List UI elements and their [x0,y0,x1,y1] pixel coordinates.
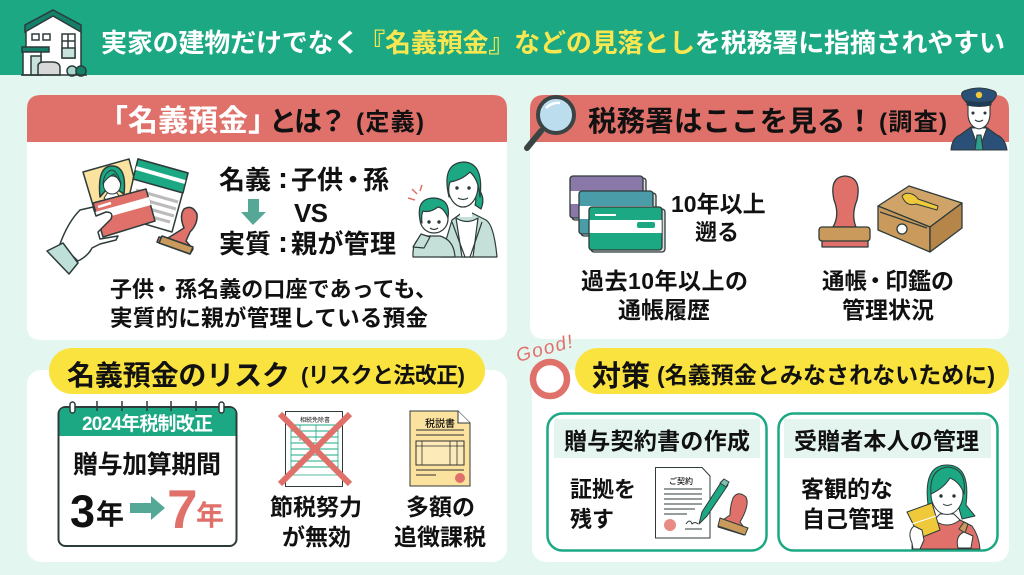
card: self management: 受贈者本人の管理 [794,428,979,454]
calendar: tax reform [58,401,236,546]
callout: over 10 years [671,191,766,245]
card: self management: 自己管理 [802,506,894,532]
label: tax savings void [270,494,362,550]
calendar: tax reform: 3 [70,486,95,537]
calendar: tax reform: 年 [96,499,124,530]
comparison text: nominee vs actual: 親が管理 [291,229,396,259]
icon: stamp [819,176,870,247]
calendar: tax reform: 年 [196,500,224,531]
label: passbook and seal: ・ [864,269,887,294]
definition text: 子供 [110,277,154,302]
label: heavy additional tax: 多額の [406,494,475,520]
card: gift contract: 残す [570,507,614,532]
heading: what is nominee deposit [98,105,424,138]
calendar: tax reform: 7 [167,478,198,540]
header band [0,0,1024,76]
icon: girl with passbook [907,465,980,549]
icon: crossed out document: 相続免除書 [300,416,330,424]
heading pill: countermeasures [575,348,1009,394]
definition text: 孫名義の口座であっても、 [175,277,437,302]
comparison text: nominee vs actual: : [278,226,288,259]
label: heavy additional tax [394,494,486,550]
label: passbook history: 過去10年以上の [581,268,748,294]
heading pill: risks: 名義預金のリスク [67,360,290,391]
label: passbook history: 通帳履歴 [618,297,710,323]
label: passbook history [581,268,748,323]
icon: good circle [514,331,577,396]
label: passbook and seal: 管理状況 [842,297,934,323]
icon: passbooks [570,176,665,252]
label: passbook and seal [822,268,954,323]
icon: hand holding cards [47,159,197,274]
icon: crossed out document [280,412,350,486]
comparison text: nominee vs actual: ・ [340,165,366,195]
panel: definition [27,95,507,340]
comparison text: nominee vs actual: 実質 [219,229,271,259]
icon: key box [878,186,962,252]
card: self management: 客観的な [801,476,893,502]
heading: what is nominee deposit: とは？ [269,106,347,137]
arrow: down [241,199,266,225]
panel: investigation [527,88,1009,339]
icon: magnifier [527,97,574,148]
calendar: tax reform: 2024年税制改正 [82,412,213,435]
icon: parent and child [408,162,497,257]
calendar: tax reform: 贈与加算期間 [73,451,221,479]
heading pill: countermeasures: 対策 [592,360,650,393]
definition text: 実質的に親が管理している預金 [110,305,428,331]
icon: house [21,10,87,76]
icon: good circle: Good! [514,331,577,367]
callout: over 10 years: 遡る [695,220,739,245]
title: 実家の建物だけでなく『名義預金』などの見落としを税務署に指摘されやすい [101,28,1005,58]
panel: countermeasures [514,331,1009,562]
heading pill: risks [49,348,485,394]
icon: officer [951,88,1007,150]
heading: what is nominee deposit: 「名義預金」 [98,105,278,138]
label: tax savings void: が無効 [282,524,351,550]
card: self management [778,414,998,550]
label: tax savings void: 節税努力 [270,494,362,520]
panel: risks [27,348,507,562]
icon: tax notice [410,411,470,486]
callout: over 10 years: 10年以上 [671,191,766,217]
comparison text: nominee vs actual: 孫 [363,165,389,195]
definition text [110,277,437,331]
label: heavy additional tax: 追徴課税 [394,524,486,550]
heading: tax office looks here: 税務署はここを見る！ [588,106,874,138]
comparison text: nominee vs actual: VS [294,198,328,228]
definition text: ・ [151,277,173,302]
comparison text: nominee vs actual [219,162,396,259]
icon: contract, pen and stamp: ご契約 [669,476,693,486]
comparison text: nominee vs actual: : [278,162,288,195]
card: gift contract: 贈与契約書の作成 [564,428,750,454]
heading: tax office looks here: (調査) [879,109,947,136]
comparison text: nominee vs actual: 子供 [291,165,343,195]
heading: what is nominee deposit: (定義) [356,109,424,136]
card: gift contract: 証拠を [570,477,636,502]
heading pill: risks: (リスクと法改正) [301,363,465,388]
label: passbook and seal: 印鑑の [885,268,954,294]
card: gift contract [548,414,766,550]
label: passbook and seal: 通帳 [822,269,868,294]
comparison text: nominee vs actual: 名義 [219,165,271,195]
icon: tax notice: 税説書 [425,417,455,430]
icon: contract, pen and stamp [656,468,748,538]
heading pill: countermeasures: (名義預金とみなされないために) [657,362,995,388]
